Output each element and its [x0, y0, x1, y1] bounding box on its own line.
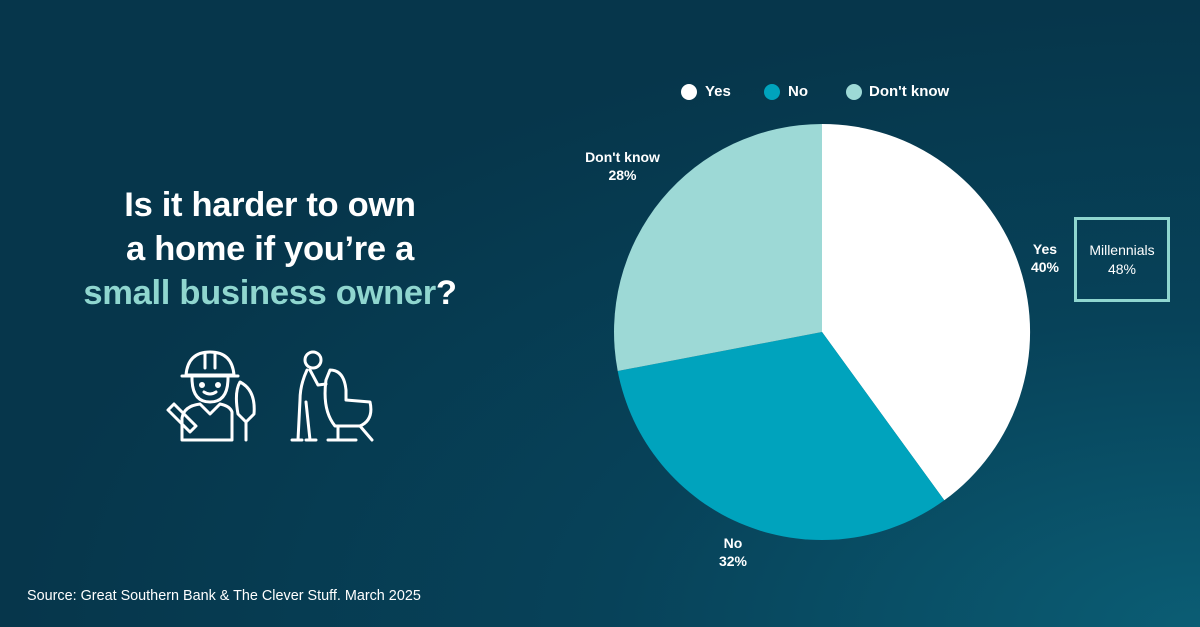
label: yes: Yes [1033, 241, 1057, 257]
title: Is it harder to own [124, 186, 416, 224]
legend: Yes [705, 83, 731, 100]
source: Source: Great Southern Bank & The Clever Stuff. March 2025 [27, 588, 421, 604]
title [83, 186, 457, 312]
title: a home if you’re a [126, 230, 414, 268]
label: don't know: 28% [608, 167, 637, 183]
legend: No [788, 83, 808, 100]
slice: yes 40% [822, 124, 1030, 500]
callout: millennials: Millennials [1089, 242, 1155, 258]
callout: millennials: 48% [1108, 260, 1136, 276]
label: no [719, 535, 747, 569]
title: small business owner? [83, 274, 457, 312]
label: no: No [724, 535, 742, 551]
icon: hairdresser [292, 352, 372, 440]
icon: tradesperson [168, 352, 254, 440]
label: yes [1031, 241, 1059, 275]
callout: millennials [1074, 217, 1170, 302]
slice: no 32% [618, 332, 944, 540]
legend [681, 83, 950, 100]
label: yes: 40% [1031, 259, 1059, 275]
slice: don't know 28% [614, 124, 822, 371]
legend: Don't know [869, 83, 949, 100]
icons: tradesperson and hairdresser [166, 350, 374, 442]
label: don't know [585, 149, 660, 183]
label: no: 32% [719, 553, 747, 569]
label: don't know: Don't know [585, 149, 660, 165]
